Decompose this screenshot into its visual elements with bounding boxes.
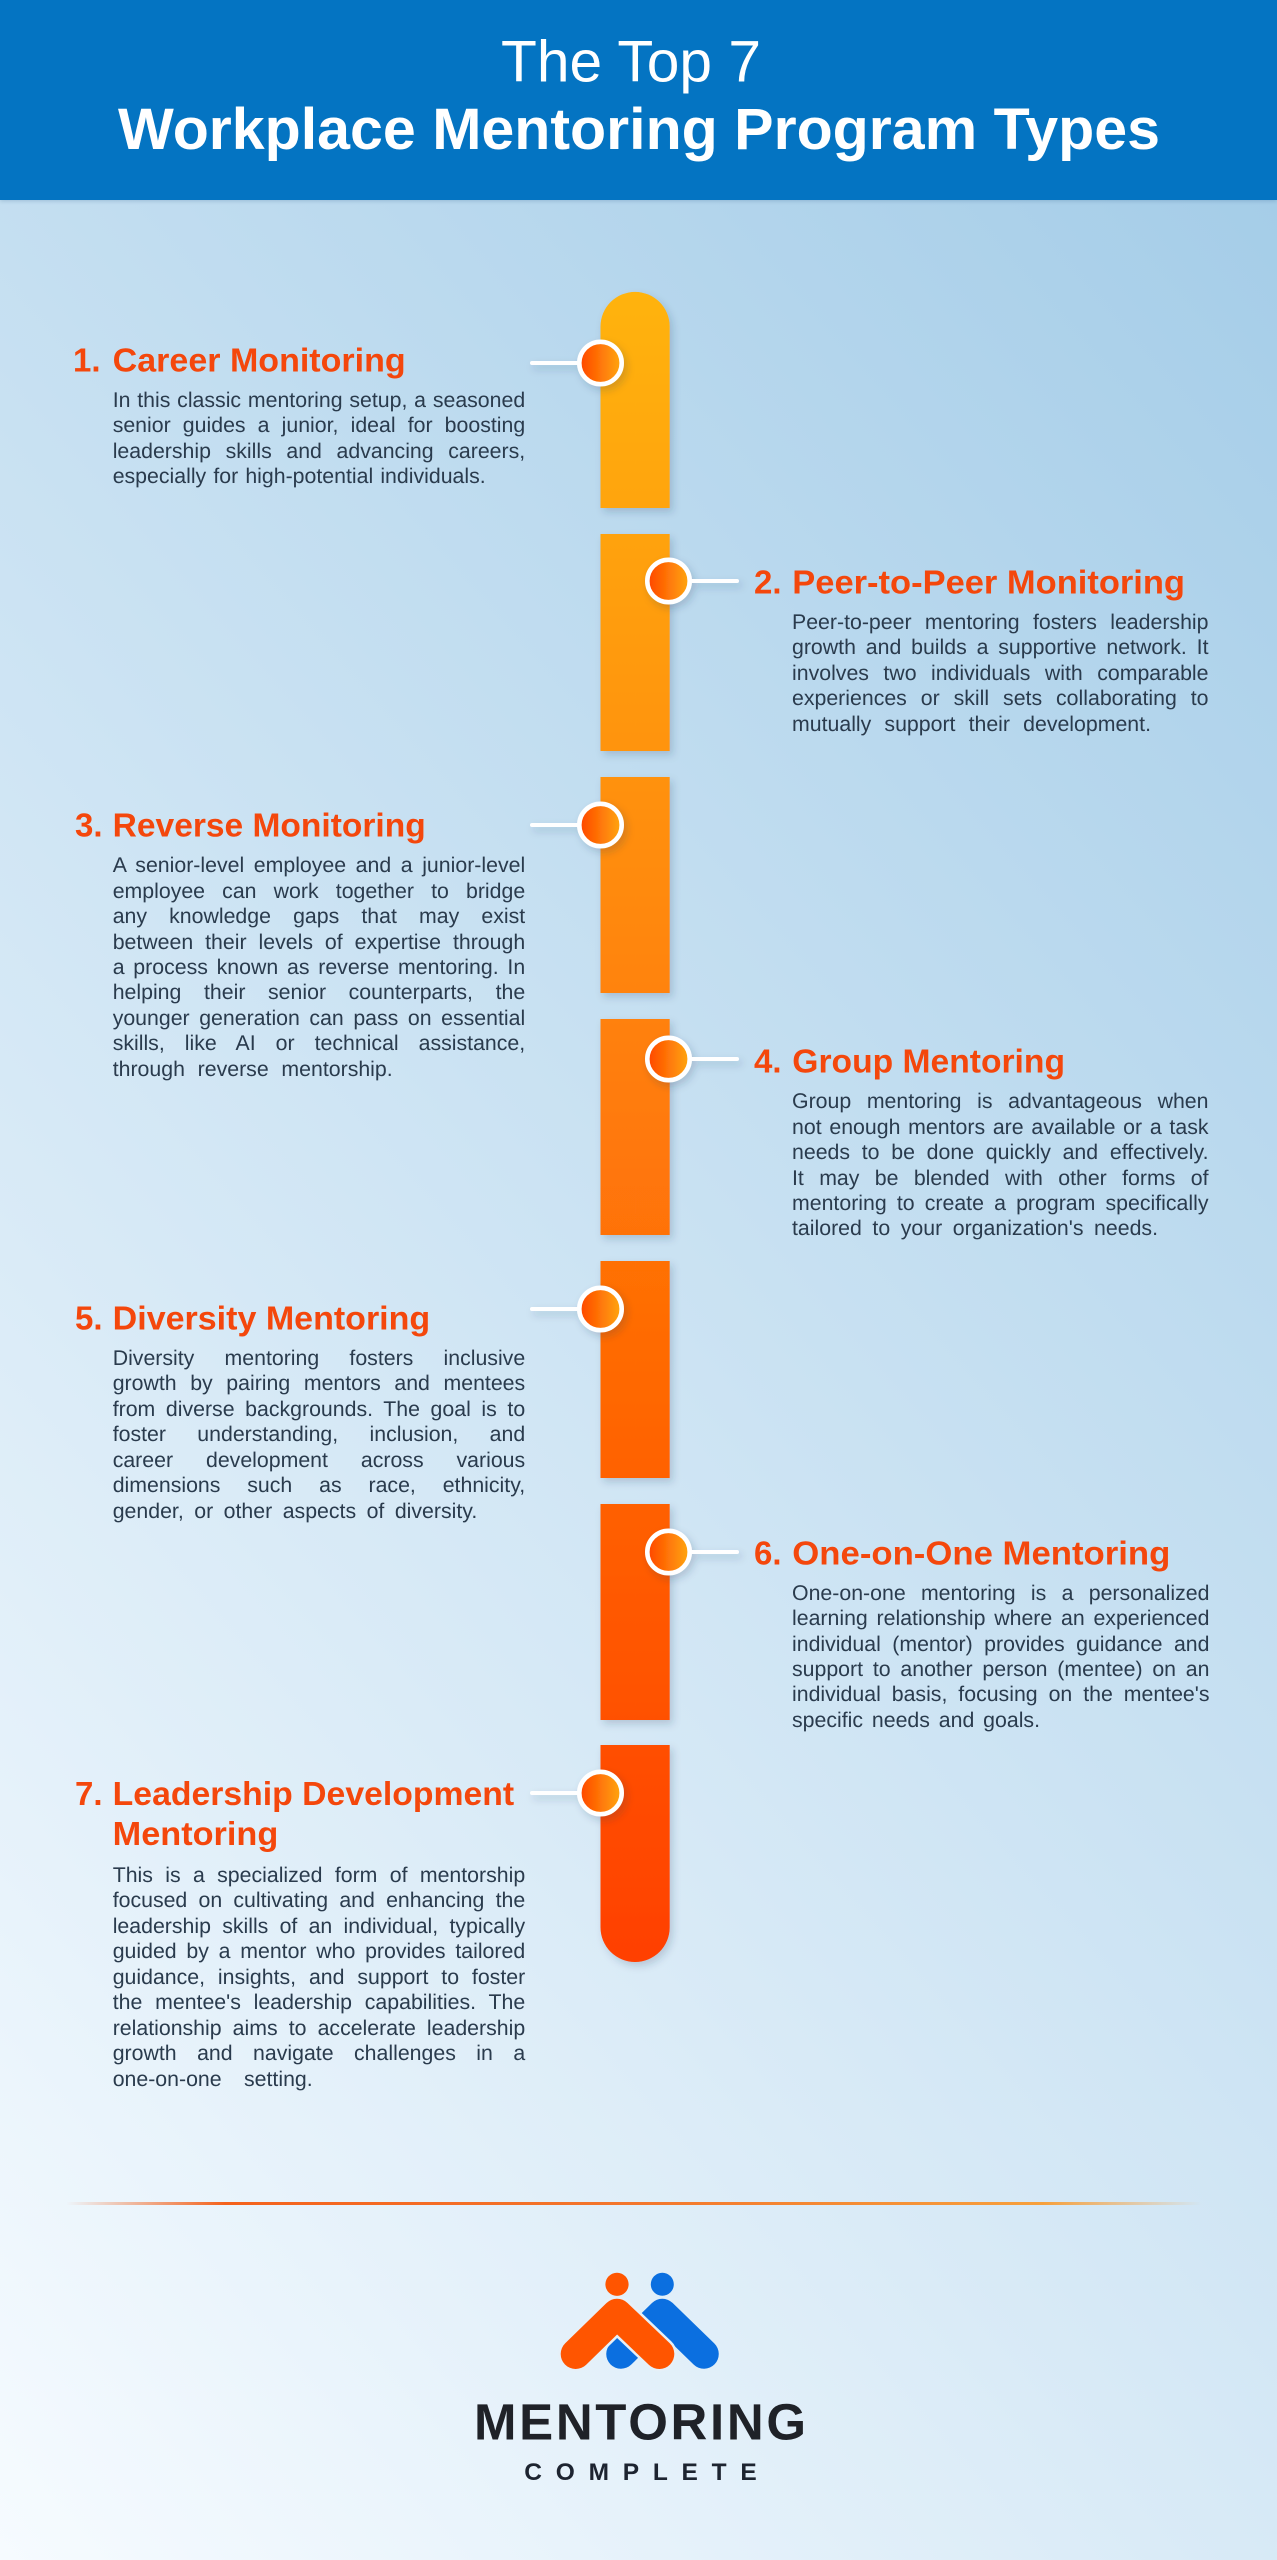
- panel: item 4 Group Mentoring: [754, 1043, 1209, 1240]
- connector 3: [530, 804, 622, 846]
- panel: item 1 Career Monitoring: [73, 342, 525, 488]
- body text 3: employee can work together to bridge: [113, 879, 525, 903]
- body text 5: from diverse backgrounds. The goal is to: [113, 1397, 525, 1421]
- body text 5: Diversity mentoring fosters inclusive: [113, 1346, 525, 1370]
- body text 1: especially for high-potential individuals.: [113, 464, 486, 488]
- body text 7: growth and navigate challenges in a: [113, 2041, 525, 2065]
- body text 6: One-on-one mentoring is a personalized: [792, 1581, 1210, 1605]
- title: The Top 7: [501, 30, 761, 95]
- body text 4: [792, 1089, 1209, 1240]
- panel: item 2 Peer-to-Peer Monitoring: [754, 563, 1208, 736]
- connector 4: [647, 1038, 739, 1080]
- body text 7: leadership skills of an individual, typically: [113, 1914, 525, 1938]
- heading 5: Diversity Mentoring: [113, 1299, 430, 1336]
- body text 2: experiences or skill sets collaborating to: [792, 686, 1208, 710]
- body text 3: A senior-level employee and a junior-level: [113, 853, 525, 877]
- body text 1: In this classic mentoring setup, a seasoned: [113, 388, 525, 412]
- body text 4: Group mentoring is advantageous when: [792, 1089, 1208, 1113]
- body text 6: individual (mentor) provides guidance and: [792, 1632, 1210, 1656]
- body text 4: needs to be done quickly and effectively.: [792, 1140, 1208, 1164]
- body text 2: growth and builds a supportive network. It: [792, 635, 1208, 659]
- body text 7: guidance, insights, and support to foster: [113, 1965, 525, 1989]
- connector 5: [530, 1288, 622, 1330]
- body text 6: [792, 1581, 1210, 1732]
- panel: item 5 Diversity Mentoring: [75, 1299, 525, 1523]
- body text 3: between their levels of expertise through: [113, 930, 525, 954]
- connector 6: [647, 1531, 739, 1573]
- title: Workplace Mentoring Program Types: [118, 97, 1160, 162]
- logo: Mentoring Complete: [474, 2272, 806, 2486]
- body text 3: a process known as reverse mentoring. In: [113, 955, 525, 979]
- heading 7: Mentoring: [113, 1815, 278, 1852]
- body text 2: [792, 610, 1208, 736]
- heading 6: 6.: [754, 1534, 782, 1571]
- heading 2: Peer-to-Peer Monitoring: [792, 563, 1185, 600]
- wordmark: MENTORING: [474, 2393, 806, 2450]
- body text 6: individual basis, focusing on the mentee's: [792, 1682, 1210, 1706]
- body text 3: any knowledge gaps that may exist: [113, 904, 525, 928]
- spine segment 2: [600, 534, 670, 751]
- body text 4: It may be blended with other forms of: [792, 1166, 1208, 1190]
- connector 7: [530, 1772, 622, 1814]
- heading 7: 7.: [75, 1775, 103, 1812]
- heading 1: 1.: [73, 342, 101, 379]
- body text 5: [113, 1346, 525, 1523]
- panel: item 3 Reverse Monitoring: [75, 807, 525, 1081]
- spine segment 5: [600, 1261, 670, 1478]
- heading 4: 4.: [754, 1043, 782, 1080]
- body text 1: leadership skills and advancing careers,: [113, 439, 525, 463]
- body text 3: skills, like AI or technical assistance,: [113, 1031, 525, 1055]
- footer divider: [66, 2202, 1202, 2204]
- heading 1: Career Monitoring: [113, 342, 406, 379]
- spine segment 4: [600, 1019, 670, 1235]
- spine segment 7: [600, 1745, 670, 1962]
- body text 4: tailored to your organization's needs.: [792, 1216, 1158, 1240]
- body text 5: foster understanding, inclusion, and: [113, 1422, 525, 1446]
- body text 2: Peer-to-peer mentoring fosters leadership: [792, 610, 1208, 634]
- body text 7: [113, 1863, 526, 2091]
- heading 5: 5.: [75, 1299, 103, 1336]
- body text 5: dimensions such as race, ethnicity,: [113, 1473, 525, 1497]
- body text 2: involves two individuals with comparable: [792, 661, 1208, 685]
- heading 7: [75, 1775, 514, 1852]
- body text 7: relationship aims to accelerate leadership: [113, 2016, 525, 2040]
- wordmark: [474, 2393, 806, 2486]
- body text 6: support to another person (mentee) on an: [792, 1657, 1210, 1681]
- spine segment 3: [600, 777, 670, 993]
- panel: item 6 One-on-One Mentoring: [754, 1534, 1210, 1732]
- heading 4: Group Mentoring: [792, 1043, 1065, 1080]
- icon: two mentor figures: [576, 2273, 704, 2354]
- body text 2: mutually support their development.: [792, 712, 1151, 736]
- spine segment 6: [600, 1504, 670, 1720]
- body text 7: the mentee's leadership capabilities. The: [113, 1990, 525, 2014]
- heading 2: 2.: [754, 563, 782, 600]
- header banner: [0, 0, 1277, 200]
- panel: item 7 Leadership Development Mentoring: [75, 1775, 526, 2091]
- body text 6: specific needs and goals.: [792, 1708, 1040, 1732]
- body text 5: growth by pairing mentors and mentees: [113, 1371, 525, 1395]
- body text 7: one-on-one setting.: [113, 2067, 313, 2091]
- title: [118, 30, 1160, 162]
- body text 7: guided by a mentor who provides tailored: [113, 1939, 525, 1963]
- connector 2: [647, 560, 739, 602]
- body text 5: career development across various: [113, 1448, 525, 1472]
- heading 3: Reverse Monitoring: [113, 807, 426, 844]
- body text 3: helping their senior counterparts, the: [113, 980, 525, 1004]
- heading 3: 3.: [75, 807, 103, 844]
- body text 6: learning relationship where an experienced: [792, 1606, 1210, 1630]
- body text 4: mentoring to create a program specifically: [792, 1191, 1208, 1215]
- body text 3: through reverse mentorship.: [113, 1057, 393, 1081]
- body text 7: This is a specialized form of mentorship: [113, 1863, 525, 1887]
- body text 4: not enough mentors are available or a task: [792, 1115, 1208, 1139]
- heading 6: One-on-One Mentoring: [792, 1534, 1170, 1571]
- heading 7: Leadership Development: [113, 1775, 514, 1812]
- body text 3: younger generation can pass on essential: [113, 1006, 525, 1030]
- body text 1: [113, 388, 525, 488]
- wordmark: COMPLETE: [524, 2459, 757, 2486]
- body text 5: gender, or other aspects of diversity.: [113, 1499, 477, 1523]
- connector 1: [530, 342, 622, 384]
- body text 7: focused on cultivating and enhancing the: [113, 1888, 525, 1912]
- body text 3: [112, 853, 525, 1081]
- body text 1: senior guides a junior, ideal for boosting: [113, 413, 525, 437]
- spine segment 1: [600, 292, 670, 508]
